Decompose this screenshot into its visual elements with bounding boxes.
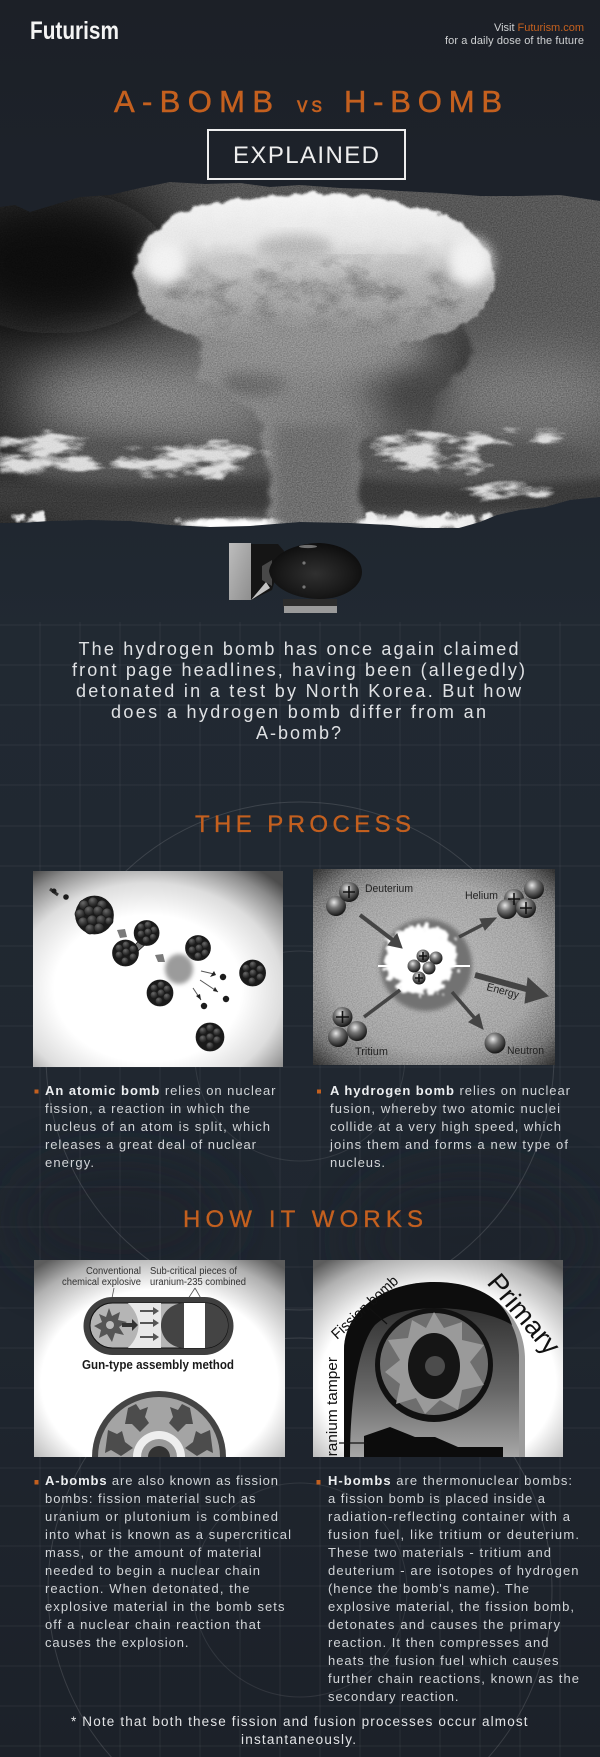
text: H-bombs: deuterium - are isotopes of hydrogen (328, 1563, 578, 1578)
text: H-bombs: a fission bomb is placed inside a (328, 1491, 546, 1506)
text: hydrogen bomb: A hydrogen bomb relies on nuclear (330, 1083, 571, 1098)
text: H-bombs: reaction. It then compresses and (328, 1635, 548, 1650)
capsule (84, 1288, 234, 1355)
text: hydrogen bomb: collide at a very high speed, which (330, 1119, 561, 1134)
intro text: The hydrogen bomb has once again claimed (78, 639, 518, 659)
text: A-bombs: into what is known as a supercritical (45, 1527, 291, 1542)
intro text: does a hydrogen bomb differ from an (111, 702, 486, 722)
caption: Gun-type assembly method (82, 1357, 234, 1372)
labels: Energy (485, 981, 521, 1002)
labels: Fission bomb (328, 1273, 402, 1343)
text: A-bombs: mass, or the amount of material (45, 1545, 261, 1560)
intro text: detonated in a test by North Korea. But how (76, 681, 522, 701)
text: atomic bomb (34, 1083, 276, 1170)
stem core (275, 425, 353, 530)
header tagline: for a daily dose of the future (445, 35, 584, 47)
labels: Primary (481, 1268, 566, 1361)
heading: the process: THE PROCESS (195, 811, 411, 838)
intro text (72, 639, 525, 743)
text: A-bombs: reaction. When detonated, the (45, 1581, 250, 1596)
footnote (71, 1714, 528, 1747)
intro text: front page headlines, having been (allegedly) (72, 660, 525, 680)
fission products (147, 936, 266, 1051)
text: atomic bomb: energy. (45, 1155, 94, 1170)
image: gun-type assembly diagram (34, 1260, 285, 1457)
icon: atomic bomb (229, 543, 362, 613)
text: A-bombs: A-bombs are also known as fission (45, 1473, 278, 1488)
film grain (0, 175, 600, 535)
flash (165, 954, 193, 984)
text: H-bombs (316, 1473, 579, 1704)
subtitle box: explained: EXPLAINED (233, 142, 379, 169)
stem and smoke (191, 324, 475, 524)
text: H-bombs: These two materials - tritium and (328, 1545, 551, 1560)
title (114, 84, 502, 119)
arrows and neutrons (50, 888, 229, 1009)
text: A-bombs: needed to begin a nuclear chain (45, 1563, 260, 1578)
header tagline: Visit Futurism.com (494, 22, 584, 34)
labels: uranium-235 combined (150, 1277, 246, 1288)
secondary shapes (364, 1427, 503, 1457)
arrows (360, 915, 548, 1029)
pointer lines (339, 1306, 387, 1443)
text: atomic bomb: releases a great deal of nuclear (45, 1137, 257, 1152)
labels: chemical explosive (62, 1277, 141, 1288)
intro text: A-bomb? (256, 723, 341, 743)
image: nuclear fusion diagram (313, 869, 555, 1065)
title: H-BOMB (344, 84, 502, 119)
title: vs (297, 94, 322, 117)
horizon cumulus (10, 510, 494, 528)
image: H-bomb primary diagram (313, 1260, 566, 1465)
text: H-bombs: H-bombs are thermonuclear bombs: (328, 1473, 572, 1488)
horizon cloud streaks (0, 426, 566, 503)
text: A-bombs: explosive material in the bomb sets (45, 1599, 285, 1614)
text: A-bombs: bombs: fission material such as (45, 1491, 256, 1506)
mushroom cap (133, 193, 495, 376)
text: atomic bomb: An atomic bomb relies on nuclear (45, 1083, 276, 1098)
labels (326, 1272, 558, 1456)
plus signs (336, 886, 532, 1023)
heading: how it works: HOW IT WORKS (183, 1206, 423, 1233)
implosion dome (92, 1391, 226, 1457)
header tagline (445, 22, 584, 47)
labels: Conventional (86, 1266, 141, 1277)
footnote: * Note that both these fission and fusion processes occur almost (71, 1714, 528, 1729)
text: hydrogen bomb: joins them and forms a new type of (329, 1137, 568, 1152)
text: hydrogen bomb (317, 1083, 571, 1170)
text: A-bombs: off a nuclear chain reaction that (45, 1617, 261, 1632)
text: H-bombs: secondary reaction. (328, 1689, 458, 1704)
text: H-bombs: fusion fuel, like tritium or deuterium. (328, 1527, 579, 1542)
text: A-bombs: causes the explosion. (45, 1635, 188, 1650)
footnote: instantaneously. (241, 1732, 356, 1747)
labels: Sub-critical pieces of (150, 1266, 237, 1277)
blast (378, 919, 472, 1011)
nucleus (75, 896, 114, 934)
fission core (375, 1308, 493, 1422)
dark band (0, 478, 600, 512)
logo: Futurism: Futurism (30, 17, 119, 45)
labels (62, 1266, 246, 1288)
particles (326, 879, 544, 1054)
text: A-bombs: uranium or plutonium is combined (45, 1509, 278, 1524)
labels: uranium tamper (324, 1357, 341, 1465)
text: H-bombs: heats the fusion fuel which causes (328, 1653, 559, 1668)
text: H-bombs: detonates and causes the primary (328, 1617, 560, 1632)
labels: Tritium (355, 1046, 388, 1058)
labels (355, 883, 544, 1058)
casing (344, 1282, 525, 1460)
image: nuclear fission diagram (33, 871, 283, 1067)
text: H-bombs: radiation-reflecting container with a (328, 1509, 571, 1524)
split nucleus pair (112, 920, 159, 966)
blueprint grid and circles (0, 622, 600, 1757)
text: atomic bomb: fission, a reaction in which the (45, 1101, 250, 1116)
text: atomic bomb: nucleus of an atom is split, which (45, 1119, 270, 1134)
text: H-bombs: (hence the bomb's name). The (328, 1581, 529, 1596)
subtitle box: explained (208, 130, 405, 179)
text: H-bombs: explosive material, the fission bomb, (328, 1599, 574, 1614)
text: hydrogen bomb: nucleus. (330, 1155, 385, 1170)
text: hydrogen bomb: fusion, whereby two atomic nuclei (330, 1101, 560, 1116)
text: A-bombs (34, 1473, 291, 1650)
text: H-bombs: further chain reactions, known as the (328, 1671, 579, 1686)
labels: Helium (465, 890, 498, 902)
labels: Deuterium (365, 883, 413, 895)
labels: Neutron (507, 1045, 544, 1057)
photo: mushroom cloud (0, 175, 600, 535)
title: A-BOMB (114, 84, 273, 119)
